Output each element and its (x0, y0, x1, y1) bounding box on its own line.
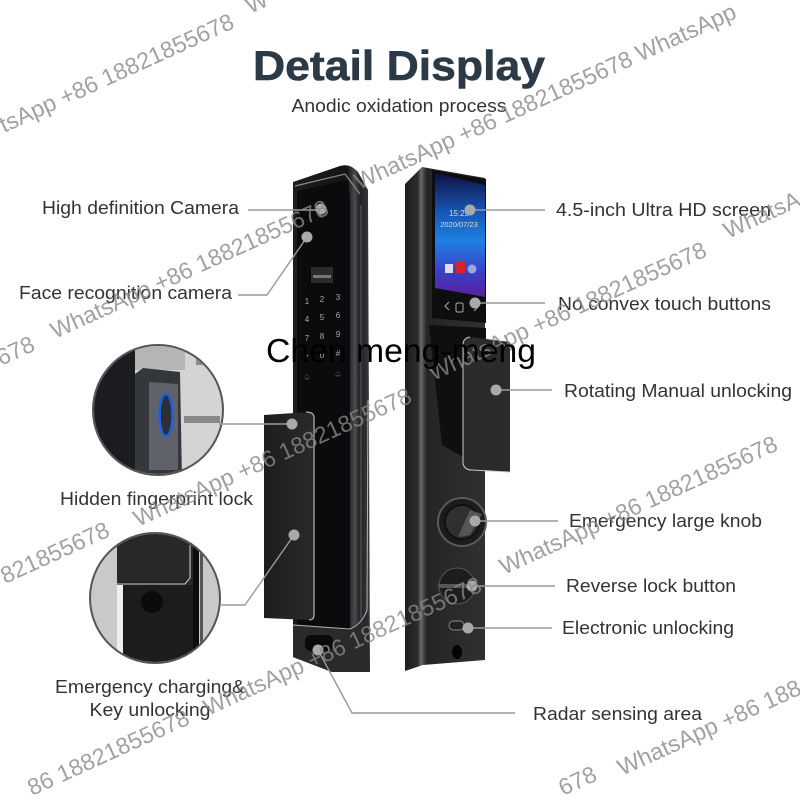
screen: 15:29 (449, 209, 470, 218)
connector: touch buttons (470, 298, 545, 308)
keypad (303, 293, 342, 382)
label: reverse lock: Reverse lock button (566, 575, 736, 596)
connector: face recognition (238, 232, 312, 295)
watermark overlay: WhatsApp +86 18821855678 (46, 194, 332, 344)
key hole (452, 645, 462, 659)
keypad: ♤ (303, 373, 311, 382)
screen surround (432, 170, 486, 323)
label: knob: Emergency large knob (569, 510, 762, 531)
reverse lock button (438, 568, 475, 604)
keypad: ♤ (334, 370, 342, 379)
label: charging and key: Emergency charging& (55, 676, 246, 697)
subtitle: Anodic oxidation process (292, 95, 506, 116)
keypad: 9 (336, 330, 341, 339)
keypad: 8 (320, 332, 325, 341)
connector: screen (464, 204, 545, 216)
rotating handle (463, 337, 510, 472)
keypad: * (305, 353, 309, 362)
connector: rotating unlock (490, 384, 552, 396)
connector: charging (221, 530, 300, 605)
lock body (405, 167, 485, 671)
side trim (355, 200, 361, 640)
lower cap with radar window (293, 400, 370, 672)
electronic unlock slot (449, 621, 464, 630)
emergency knob (438, 498, 486, 546)
camera lens (316, 208, 326, 218)
overlay name: Chen meng-meng (266, 332, 536, 369)
touch buttons (445, 302, 478, 312)
keypad: 7 (305, 334, 310, 343)
keypad: 1 (305, 297, 310, 306)
connector: reverse lock (466, 580, 555, 592)
label: screen: 4.5-inch Ultra HD screen (556, 199, 771, 220)
title: Detail Display (253, 42, 546, 89)
watermark overlay: WhatsApp +86 18821855678 (199, 571, 485, 721)
label: face recognition: Face recognition camera (19, 282, 233, 303)
watermark overlay: WhatsApp +86 18821855678 WhatsApp (350, 0, 740, 195)
label: electronic unlock: Electronic unlocking (562, 617, 734, 638)
lock body (293, 165, 370, 672)
blue ring (160, 394, 172, 436)
watermark overlay: WhatsApp +86 18821855678 (129, 382, 415, 532)
mini display (311, 267, 333, 283)
keypad: 5 (320, 313, 325, 322)
watermark overlay: tsApp +86 18821855678 (0, 8, 238, 138)
watermark overlay: 86 18821855678 (23, 704, 193, 800)
keypad: 0 (320, 351, 325, 360)
keypad: # (336, 349, 341, 358)
label: radar: Radar sensing area (533, 703, 703, 724)
connector: fingerprint (219, 418, 298, 430)
fingerprint detail circle (90, 340, 223, 480)
screen (435, 173, 485, 297)
label: fingerprint: Hidden fingerprint lock (60, 488, 254, 509)
screen: 2020/07/23 (440, 220, 478, 229)
connector: electronic unlock (462, 622, 552, 634)
connector: high definition camera (248, 204, 326, 214)
watermark overlay: WhatsApp +86 18821855678 (424, 236, 710, 386)
label: key unlocking: Key unlocking (90, 699, 210, 720)
sliding handle (264, 412, 315, 620)
right lock: rear view with screen (405, 167, 510, 671)
handle recess (429, 325, 486, 470)
left lock: front view (264, 165, 370, 672)
keypad: 3 (336, 293, 341, 302)
label: rotating unlock: Rotating Manual unlocking (564, 380, 792, 401)
watermark overlay: WhatsApp +86 18821855678 (495, 430, 781, 580)
keypad: 6 (336, 311, 341, 320)
watermark overlay: 678 (554, 761, 600, 800)
connector: radar (312, 644, 515, 713)
label: camera: High definition Camera (42, 197, 240, 218)
keypad: 2 (320, 295, 325, 304)
connector: knob (470, 516, 558, 526)
keypad: 4 (305, 315, 310, 324)
charging port detail circle (90, 530, 220, 670)
watermark overlay: WhatsApp +86 188 (613, 674, 800, 781)
label: touch buttons: No convex touch buttons (558, 293, 771, 314)
